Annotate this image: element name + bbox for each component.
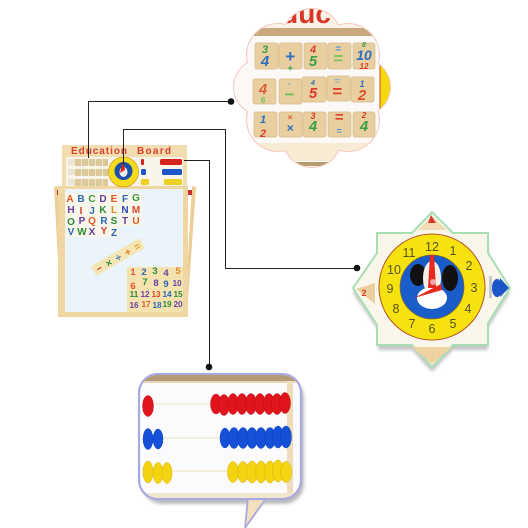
letter tiles: Z	[111, 228, 117, 239]
clock numbers: 10	[387, 263, 401, 277]
flower photo: −	[284, 85, 294, 104]
number tiles: 17	[141, 300, 151, 309]
number tiles: 6	[130, 281, 136, 292]
operator tiles: −	[94, 263, 105, 276]
clock numbers: 7	[409, 317, 416, 331]
letter tiles: I	[80, 206, 83, 217]
clock numbers: 8	[393, 302, 400, 316]
flower photo: +	[287, 63, 293, 73]
flower photo: 4	[308, 118, 318, 135]
letter tiles: W	[77, 227, 87, 238]
number tiles: 7	[142, 277, 148, 288]
number tiles: 15	[173, 290, 183, 299]
clock numbers: 5	[450, 317, 457, 331]
flower photo: 4	[258, 81, 268, 98]
clock numbers: 9	[387, 282, 394, 296]
flower photo: 4	[260, 53, 270, 70]
clock numbers: 6	[429, 322, 436, 336]
yellow beads	[143, 460, 292, 484]
letter tiles: U	[132, 216, 140, 227]
number tiles: 16	[129, 301, 139, 310]
letter tiles: L	[111, 205, 117, 216]
letter tiles: V	[68, 227, 75, 238]
wooden tips: 2	[361, 288, 367, 298]
clock face	[379, 234, 485, 340]
star shadow	[353, 217, 510, 372]
star callout: clock	[353, 212, 510, 372]
number tiles: 9	[163, 279, 169, 290]
letter tiles: N	[121, 205, 129, 216]
letter tiles: C	[88, 194, 96, 205]
flower photo: -	[288, 81, 291, 88]
flower photo: =	[336, 126, 342, 136]
blue beads	[143, 426, 292, 450]
number tiles: 10	[172, 279, 182, 288]
star body	[353, 212, 510, 367]
flower photo: 1	[260, 114, 266, 126]
speech bubble callout: abacus	[139, 374, 304, 528]
flower photo: =	[333, 49, 343, 68]
flower photo: 8	[362, 42, 366, 49]
letter tiles: G	[132, 193, 140, 204]
wooden frame	[58, 145, 188, 317]
number tiles: 19	[162, 300, 172, 309]
number tiles: 14	[162, 290, 172, 299]
toy board	[54, 145, 196, 317]
number tiles: 18	[152, 301, 162, 310]
operator tiles: ×	[104, 257, 115, 270]
letter tiles: S	[111, 216, 118, 227]
flower photo: ×	[286, 121, 294, 135]
flower photo	[234, 9, 390, 167]
letter tiles	[65, 193, 142, 239]
letter tiles: Y	[101, 226, 108, 237]
small abacus	[141, 159, 182, 185]
number tiles: 20	[173, 300, 183, 309]
operator tiles: ÷	[114, 252, 124, 264]
flower photo: 3	[310, 111, 316, 121]
letter tiles: R	[100, 216, 108, 227]
letter tiles: P	[79, 216, 86, 227]
clock numbers: 12	[425, 240, 439, 254]
clock hands	[414, 255, 442, 298]
letter tiles: H	[67, 205, 75, 216]
letter tiles: Q	[88, 216, 96, 227]
flower photo: +	[285, 47, 295, 66]
flower photo: =	[335, 109, 344, 126]
whiteboard	[65, 189, 183, 312]
flower photo: =	[335, 44, 341, 55]
bubble body	[139, 374, 301, 499]
number tiles: 12	[140, 290, 150, 299]
small clock	[108, 157, 138, 187]
number tiles: 1	[130, 267, 136, 278]
flower photo: 10	[356, 47, 372, 63]
flower photo: 2	[357, 87, 367, 104]
letter tiles: A	[66, 194, 74, 205]
number tiles: 3	[152, 266, 158, 277]
red beads	[142, 392, 290, 416]
operator tiles	[91, 238, 146, 277]
board title: Education	[71, 146, 127, 157]
board title: Board	[137, 146, 171, 157]
dog figure	[410, 261, 458, 309]
number tiles: 2	[141, 267, 147, 278]
letter tiles: D	[99, 194, 107, 205]
flower photo: 4	[310, 80, 315, 87]
wooden tips	[356, 215, 509, 364]
flower photo: 5	[309, 53, 318, 70]
bubble tail	[245, 497, 267, 528]
letter tiles: X	[89, 227, 96, 238]
flower photo: 6	[261, 96, 266, 105]
flower photo: 4	[309, 44, 316, 56]
flower photo: 2	[259, 128, 266, 140]
clock numbers	[387, 240, 478, 336]
clock numbers: 4	[465, 302, 472, 316]
number tiles: 13	[151, 290, 161, 299]
number tiles: 8	[153, 278, 159, 289]
clock numbers: 3	[471, 281, 478, 295]
number tiles: 5	[175, 266, 181, 277]
stand legs	[54, 186, 196, 315]
operator tiles: +	[123, 246, 134, 259]
clock numbers: 1	[450, 244, 457, 258]
number tiles	[127, 266, 183, 312]
flower callout: number cubes	[233, 8, 391, 168]
letter tiles: F	[122, 194, 128, 205]
operator tiles: =	[133, 241, 143, 254]
number tiles: 4	[163, 268, 169, 279]
letter tiles: M	[132, 205, 140, 216]
flower photo: 5	[309, 85, 318, 102]
letter tiles: J	[89, 206, 95, 217]
flower photo: 2	[361, 111, 367, 120]
bubble shadow	[142, 378, 304, 504]
small number cubes	[68, 159, 108, 186]
flower photo: 12	[360, 62, 369, 71]
letter tiles: T	[122, 216, 128, 227]
connector dots	[206, 98, 360, 370]
flower photo: ×	[288, 113, 293, 122]
flower photo: 1	[359, 79, 365, 89]
clock numbers: 2	[466, 259, 473, 273]
flower border	[233, 8, 391, 168]
number tiles: 11	[130, 290, 139, 299]
abacus photo	[140, 375, 300, 498]
flower photo: =	[334, 76, 340, 86]
clock numbers: 11	[403, 246, 416, 260]
letter tiles: B	[77, 194, 85, 205]
letter tiles: E	[111, 194, 118, 205]
flower photo: 4	[359, 118, 369, 135]
letter tiles: K	[99, 205, 107, 216]
letter tiles: O	[67, 217, 75, 228]
flower photo: 3	[262, 44, 268, 56]
connector lines	[88, 102, 358, 366]
board title	[71, 146, 171, 157]
flower photo: =	[332, 82, 342, 101]
